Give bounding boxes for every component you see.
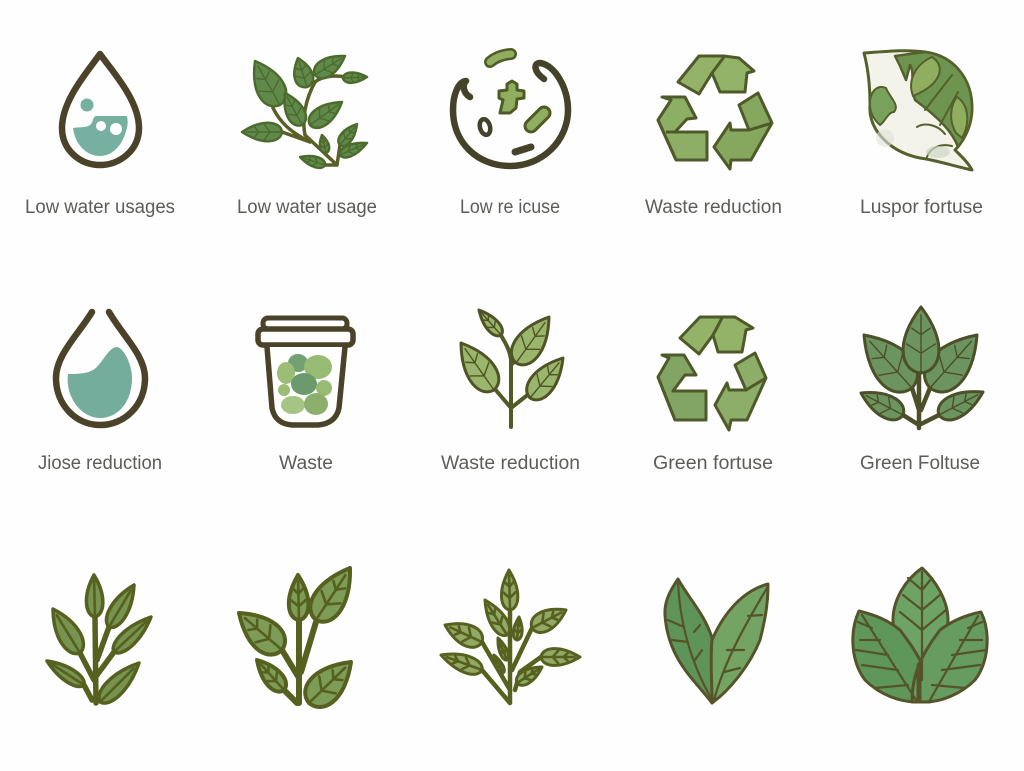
icon: narrow-leaf plant — [43, 575, 156, 708]
icon: broken ring with green pieces — [453, 54, 568, 166]
cell: waste cup — [258, 318, 353, 474]
icon: two leaves — [665, 579, 768, 703]
label: Luspor fortuse — [860, 197, 983, 218]
icon: recycling arrows — [658, 317, 766, 430]
label: Low water usage — [237, 197, 377, 218]
icon: three-leaf cluster — [853, 568, 987, 702]
label: Waste reduction — [645, 197, 782, 218]
icon: water drop with bubbles — [62, 54, 139, 165]
label: Waste — [279, 453, 333, 474]
label: Low water usages — [25, 197, 175, 218]
icon: broad-leaf plant — [229, 560, 363, 714]
icon: five-leaf plant — [850, 307, 991, 428]
cell: luspor fortuse leaf — [860, 51, 983, 218]
cell: green foltuse plant — [850, 307, 991, 474]
cell: waste reduction plant — [441, 306, 580, 474]
label: Low re icuse — [460, 197, 560, 218]
cell: jiose reduction drop — [38, 312, 162, 474]
label: Green fortuse — [653, 453, 773, 474]
cell: low re icuse ring — [453, 54, 568, 218]
icon: cup with green pebbles — [258, 318, 353, 425]
icon: partly white leaf — [864, 51, 972, 170]
cell: waste reduction recycle — [645, 56, 782, 218]
label: Jiose reduction — [38, 453, 162, 474]
label: Green Foltuse — [860, 453, 980, 474]
icon: leafy branch — [242, 49, 369, 170]
icon: open water drop — [56, 312, 145, 425]
icon: many-leaf herb — [438, 570, 580, 703]
cell: low water usage branch — [237, 49, 377, 218]
cell: green fortuse recycle — [653, 317, 773, 474]
icon: four-leaf sprout — [450, 306, 572, 427]
label: Waste reduction — [441, 453, 580, 474]
icon: recycling arrows — [658, 56, 772, 169]
cell: low water usages drop — [25, 54, 175, 218]
